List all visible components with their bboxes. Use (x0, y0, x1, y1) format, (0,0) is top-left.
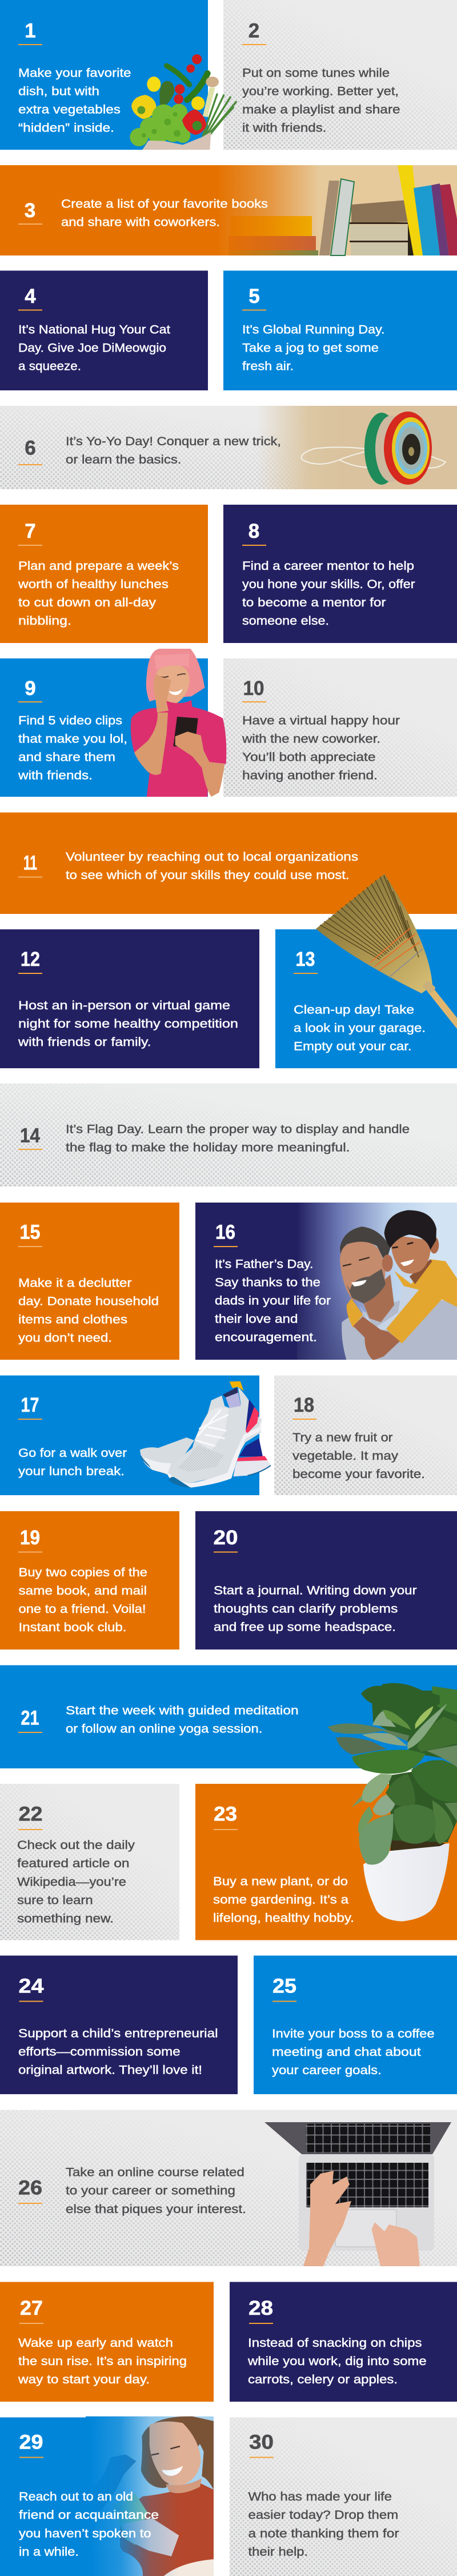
panel 30: thank-you note (230, 2418, 457, 2576)
text: global running day (242, 322, 385, 373)
number 3: 3 (25, 199, 35, 222)
text: find a career mentor (242, 559, 415, 628)
text: plan and prepare lunches (18, 559, 179, 628)
text: global running day: Take a jog to get some (242, 341, 379, 354)
number 25: 25 (272, 1975, 296, 1997)
text: find a career mentor: someone else. (242, 614, 329, 628)
text: journal: Start a journal. Writing down your (214, 1583, 417, 1597)
text: make your favorite dish (18, 66, 131, 135)
text: father's day: It’s Father’s Day. (215, 1257, 313, 1271)
number 28: 28 (248, 2297, 273, 2319)
panel 27: sunrise (0, 2282, 214, 2402)
text: father's day: dads in your life for (215, 1294, 331, 1308)
text: journal: and free up some headspace. (214, 1620, 396, 1634)
number 6: 6 (25, 437, 36, 460)
text: new plant (213, 1875, 354, 1925)
text: put on some tunes (242, 66, 400, 135)
number 16: 16 (215, 1221, 235, 1244)
text: flag day: the flag to make the holiday more meaningful. (66, 1141, 350, 1155)
text: wikipedia: sure to learn (17, 1893, 93, 1907)
text: create a list of books: Create a list of your favorite books (61, 197, 268, 210)
text: online course (66, 2165, 246, 2216)
text: create a list of books (61, 197, 268, 229)
text: child's artwork: Support a child’s entrepreneurial (18, 2027, 218, 2040)
number 4 (18, 285, 42, 311)
number 14: 14 (20, 1125, 40, 1147)
text: wikipedia (17, 1838, 135, 1925)
text: new fruit: become your favorite. (292, 1467, 425, 1481)
text: find a career mentor: to become a mentor for (242, 596, 386, 609)
text: put on some tunes: make a playlist and share (242, 103, 400, 117)
number 11: 11 (23, 852, 37, 874)
panel 10: virtual happy hour (223, 658, 457, 797)
text: child's artwork: original artwork. They’ll love it! (18, 2063, 202, 2077)
text: reach out (19, 2490, 159, 2558)
text: game night: with friends or family. (18, 1035, 151, 1049)
text: coffee with boss (272, 2027, 435, 2077)
panel 8: career mentor (223, 505, 457, 643)
text: walk over lunch: Go for a walk over (18, 1446, 127, 1460)
text: meditation: or follow an online yoga session. (66, 1722, 262, 1735)
image: broom (316, 874, 457, 1028)
number 24: 24 (18, 1975, 44, 1997)
text: yo-yo day: It’s Yo-Yo Day! Conquer a new trick, (66, 434, 281, 448)
text: declutter day: Make it a declutter (18, 1276, 131, 1289)
number 18: 18 (294, 1394, 314, 1416)
image: potted fiddle-leaf plant (327, 1683, 457, 1922)
text: declutter day: day. Donate household (18, 1294, 159, 1308)
number 27: 27 (20, 2297, 43, 2319)
panel 22: wikipedia article (0, 1784, 179, 1940)
text: reach out: you haven’t spoken to (19, 2526, 151, 2540)
number 29: 29 (19, 2431, 43, 2453)
panel 5: global running day (223, 271, 457, 390)
text: wikipedia: Wikipedia—you’re (17, 1875, 126, 1888)
text: yo-yo day (66, 434, 281, 466)
text: put on some tunes: it with friends. (242, 121, 327, 135)
text: find a career mentor: Find a career mentor to help (242, 559, 414, 573)
image: vegetables in paper bag (130, 54, 236, 150)
text: coffee with boss: your career goals. (272, 2063, 382, 2077)
text: make your favorite dish: Make your favorite (18, 66, 131, 80)
text: clean-up day: a look in your garage. (294, 1021, 426, 1035)
text: two copies: Buy two copies of the (18, 1565, 147, 1579)
text: two copies: Instant book club. (18, 1620, 127, 1634)
number 15: 15 (19, 1221, 40, 1244)
text: healthy snacks: Instead of snacking on chips (248, 2336, 422, 2350)
text: new fruit: Try a new fruit or (292, 1431, 393, 1444)
text: healthy snacks (247, 2336, 427, 2386)
text: plan and prepare lunches: worth of healthy lunches (18, 577, 169, 591)
text: walk over lunch (18, 1446, 127, 1478)
text: find 5 video clips: with friends. (18, 768, 93, 782)
text: reach out: in a while. (19, 2545, 79, 2558)
text: child's artwork: efforts—commission some (18, 2045, 181, 2059)
number 20: 20 (214, 1527, 238, 1549)
panel 19: two copies of a book (0, 1511, 179, 1650)
text: national hug your cat day: Day. Give Joe DiMeowgio (18, 341, 166, 354)
text: father's day: their love and (215, 1312, 298, 1326)
panel 4: hug your cat (0, 271, 208, 390)
text: thank-you note: their help. (248, 2545, 308, 2558)
panel 18: new fruit (274, 1375, 457, 1495)
text: sunrise: way to start your day. (18, 2373, 150, 2386)
panel 6: yo-yo day (0, 406, 457, 489)
text: meditation (66, 1703, 299, 1735)
text: global running day: It’s Global Running Day. (242, 322, 385, 336)
text: new fruit: vegetable. It may (292, 1449, 398, 1463)
number 9: 9 (25, 677, 36, 700)
text: coffee with boss: Invite your boss to a coffee (272, 2027, 435, 2040)
number 4: 4 (25, 285, 36, 307)
text: two copies: one to a friend. Voila! (18, 1602, 146, 1616)
panel 12: game night (0, 929, 259, 1068)
text: yo-yo day: or learn the basics. (66, 453, 182, 466)
number 2: 2 (248, 19, 259, 42)
text: father's day: encouragement. (215, 1331, 317, 1344)
text: journal (214, 1583, 417, 1634)
text: wikipedia: featured article on (17, 1856, 129, 1870)
text: virtual happy hour: with the new coworker. (242, 732, 380, 745)
panel 29: reach out to a friend (0, 2417, 214, 2576)
number 1: 1 (25, 19, 36, 42)
number 13: 13 (296, 948, 315, 971)
number 12: 12 (21, 948, 40, 971)
panel 17: walk over lunch (0, 1375, 259, 1495)
text: clean-up day (294, 1003, 426, 1053)
text: volunteer: Volunteer by reaching out to local organizations (66, 850, 358, 864)
number 21: 21 (21, 1707, 39, 1730)
number 11 (18, 852, 42, 878)
text: declutter day (18, 1276, 159, 1344)
number 2 (242, 19, 266, 45)
text: virtual happy hour: Have a virtual happy hour (242, 713, 400, 727)
text: new plant: lifelong, healthy hobby. (213, 1911, 354, 1925)
text: global running day: fresh air. (242, 359, 294, 373)
text: sunrise: the sun rise. It’s an inspiring (18, 2354, 187, 2368)
number 8 (242, 520, 266, 546)
text: sunrise: Wake up early and watch (18, 2336, 173, 2350)
text: healthy snacks: while you work, dig into some (247, 2354, 427, 2368)
panel 9: video clips (0, 658, 208, 797)
number 30: 30 (249, 2431, 274, 2453)
text: thank-you note: a note thanking them for (248, 2526, 399, 2540)
text: sunrise (18, 2336, 187, 2386)
text: online course: Take an online course related (66, 2165, 244, 2179)
text: coffee with boss: meeting and chat about (272, 2045, 421, 2059)
panel 11: volunteer (0, 813, 457, 914)
image: running shoes (140, 1381, 271, 1488)
text: make your favorite dish: dish, but with (18, 85, 99, 98)
number 10: 10 (243, 677, 264, 700)
image: laughing woman with phone (131, 649, 226, 797)
text: virtual happy hour (242, 713, 400, 782)
panel 21: meditation (0, 1666, 457, 1768)
text: clean-up day: Empty out your car. (294, 1039, 412, 1053)
panel 23: new plant (195, 1784, 457, 1940)
text: game night: Host an in-person or virtual game (18, 999, 230, 1012)
text: find 5 video clips: that make you lol, (18, 732, 127, 745)
text: declutter day: you don’t need. (18, 1331, 112, 1344)
text: make your favorite dish: “hidden” inside. (18, 121, 114, 135)
panel 2: tunes (223, 0, 457, 150)
text: make your favorite dish: extra vegetables (18, 103, 121, 117)
text: find a career mentor: you hone your skills. Or, offer (242, 577, 415, 591)
number 19: 19 (20, 1527, 40, 1549)
text: game night (18, 999, 238, 1049)
text: father's day: Say thanks to the (215, 1276, 320, 1289)
text: healthy snacks: carrots, celery or apples. (248, 2373, 398, 2386)
text: flag day (66, 1123, 410, 1155)
text: child's artwork (18, 2027, 218, 2077)
panel 28: healthy snacks (230, 2282, 457, 2402)
number 1 (18, 19, 42, 45)
image: stacks of books (228, 165, 457, 255)
text: journal: thoughts can clarify problems (214, 1601, 398, 1615)
number 7 (18, 520, 42, 546)
text: wikipedia: something new. (17, 1911, 114, 1925)
text: find 5 video clips: Find 5 video clips (18, 713, 122, 727)
text: national hug your cat day: a squeeze. (18, 359, 81, 373)
text: new fruit (292, 1431, 425, 1481)
text: two copies: same book, and mail (18, 1584, 147, 1597)
panel 26: online course (0, 2110, 457, 2266)
text: meditation: Start the week with guided meditation (66, 1703, 299, 1717)
text: online course: else that piques your interest. (66, 2202, 246, 2216)
number 26: 26 (18, 2176, 42, 2199)
number 9 (18, 677, 42, 702)
number 3 (18, 199, 42, 225)
number 5: 5 (248, 285, 260, 307)
text: declutter day: items and clothes (18, 1312, 127, 1326)
panel 20: journal (195, 1511, 457, 1650)
text: wikipedia: Check out the daily (17, 1838, 135, 1852)
number 17: 17 (21, 1394, 39, 1416)
text: walk over lunch: your lunch break. (18, 1464, 125, 1478)
text: find 5 video clips (18, 713, 127, 782)
text: plan and prepare lunches: nibbling. (18, 614, 71, 628)
panel 7: healthy lunches (0, 505, 208, 643)
text: thank-you note: easier today? Drop them (248, 2508, 398, 2522)
text: new plant: some gardening. It’s a (213, 1893, 348, 1907)
image: smiling woman with phone (78, 2417, 214, 2576)
text: new plant: Buy a new plant, or do (213, 1875, 348, 1888)
number 23: 23 (214, 1803, 237, 1826)
number 6 (18, 437, 42, 465)
number 5 (242, 285, 266, 311)
text: thank-you note (248, 2490, 399, 2558)
text: thank-you note: Who has made your life (248, 2490, 392, 2503)
panel 25: coffee with boss (254, 1956, 457, 2094)
text: reach out: friend or acquaintance (19, 2508, 159, 2522)
image: father and son (340, 1210, 457, 1360)
panel 13: clean-up day (275, 929, 457, 1068)
text: find 5 video clips: and share them (18, 750, 115, 764)
text: clean-up day: Clean-up day! Take (294, 1003, 414, 1016)
text: put on some tunes: Put on some tunes while (242, 66, 390, 80)
number 22: 22 (18, 1803, 42, 1826)
text: volunteer (66, 850, 358, 882)
text: father's day (215, 1257, 331, 1344)
text: put on some tunes: you’re working. Better yet, (242, 85, 399, 98)
panel 16: father's day (195, 1203, 457, 1360)
image: hands on laptop (264, 2122, 451, 2266)
text: reach out: Reach out to an old (19, 2490, 133, 2503)
text: volunteer: to see which of your skills they could use most. (66, 868, 350, 882)
text: game night: night for some healthy competition (18, 1017, 238, 1031)
text: flag day: It’s Flag Day. Learn the proper way to display and handle (66, 1123, 410, 1136)
text: national hug your cat day: It’s National Hug Your Cat (18, 322, 170, 336)
text: create a list of books: and share with coworkers. (61, 215, 220, 229)
panel 15: declutter (0, 1203, 179, 1360)
text: two copies (18, 1565, 147, 1634)
text: plan and prepare lunches: to cut down on all-day (18, 596, 156, 609)
panel 24: child's artwork (0, 1956, 238, 2094)
number 8: 8 (248, 520, 259, 542)
text: plan and prepare lunches: Plan and prepare a week’s (18, 559, 179, 573)
text: national hug your cat day (18, 322, 170, 373)
text: virtual happy hour: having another friend. (242, 768, 378, 782)
text: online course: to your career or something (66, 2183, 235, 2197)
panel 14: flag day (0, 1084, 457, 1187)
text: virtual happy hour: You’ll both appreciate (242, 750, 376, 764)
panel 1: favorite dish (0, 0, 208, 150)
number 7: 7 (25, 520, 36, 542)
panel 3: favorite books (0, 165, 457, 255)
image: yo-yo (302, 412, 446, 485)
